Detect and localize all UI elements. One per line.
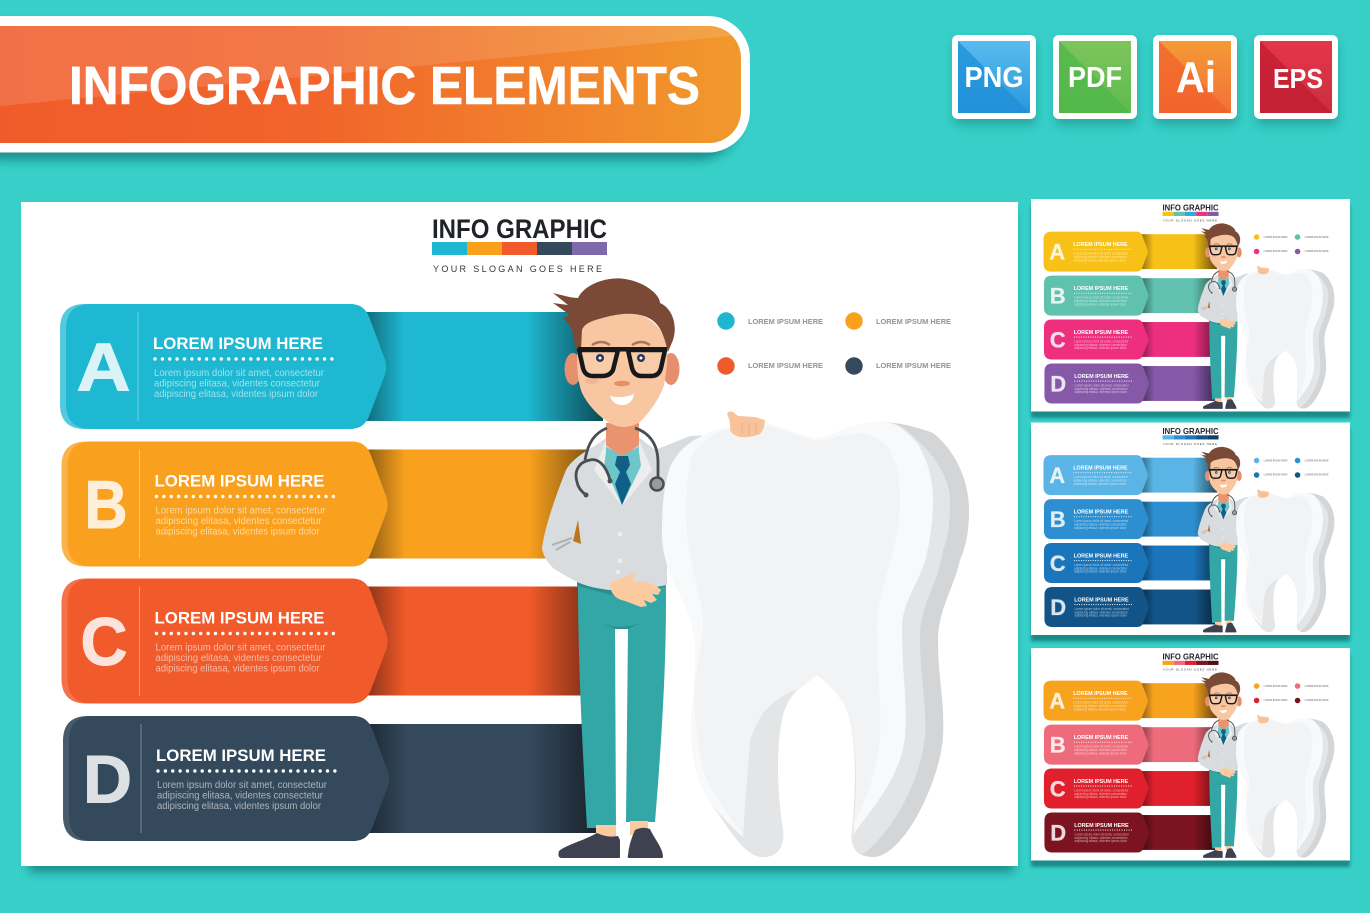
panel: thumbnail warm: LOREM IPSUM HERE (1264, 685, 1288, 688)
title text: INFOGRAPHIC ELEMENTS (69, 56, 700, 116)
panel: thumbnail warm: INFO GRAPHIC (1163, 652, 1219, 662)
band B: adipiscing elitasa, videntes consectetur (156, 516, 322, 527)
panel: thumbnail multicolour: LOREM IPSUM HERE (1264, 250, 1288, 253)
panel: thumbnail blue: YOUR SLOGAN GOES HERE (1163, 442, 1217, 446)
panel: thumbnail multicolour: adipiscing elitasa, videntes consectetur (1074, 343, 1128, 347)
band C: C (80, 604, 128, 680)
band C: adipiscing elitasa, videntes ipsum dolor (156, 664, 320, 674)
panel: thumbnail multicolour: adipiscing elitasa, videntes ipsum dolor (1074, 302, 1127, 306)
legend: LOREM IPSUM HERE (748, 317, 823, 326)
panel: thumbnail multicolour (1031, 199, 1350, 418)
panel: thumbnail multicolour: YOUR SLOGAN GOES HERE (1163, 218, 1217, 222)
band D: adipiscing elitasa, videntes ipsum dolor (157, 801, 322, 812)
panel: thumbnail warm (1031, 648, 1350, 867)
panel: thumbnail multicolour: adipiscing elitasa, videntes ipsum dolor (1075, 390, 1128, 394)
panel: thumbnail blue (1031, 422, 1350, 641)
panel: thumbnail warm: LOREM IPSUM HERE (1305, 699, 1329, 702)
panel: thumbnail warm: adipiscing elitasa, videntes ipsum dolor (1074, 751, 1127, 755)
heading: info graphic: YOUR SLOGAN GOES HERE (433, 264, 602, 274)
band A: LOREM IPSUM HERE (153, 334, 323, 353)
panel: thumbnail warm: LOREM IPSUM HERE (1074, 735, 1128, 741)
panel: thumbnail multicolour: LOREM IPSUM HERE (1074, 286, 1128, 292)
panel: thumbnail blue: adipiscing elitasa, videntes ipsum dolor (1074, 526, 1127, 530)
panel: thumbnail blue: LOREM IPSUM HERE (1073, 466, 1128, 472)
panel: thumbnail warm: adipiscing elitasa, videntes ipsum dolor (1074, 795, 1127, 799)
panel: thumbnail warm: Lorem ipsum dolor sit amet, consectetur (1074, 745, 1129, 749)
icon: PDF format badge (1053, 35, 1137, 125)
panel: thumbnail multicolour: LOREM IPSUM HERE (1264, 236, 1288, 239)
panel: thumbnail multicolour: Lorem ipsum dolor sit amet, consectetur (1074, 252, 1129, 256)
panel: thumbnail blue: adipiscing elitasa, videntes consectetur (1075, 610, 1129, 614)
panel: thumbnail multicolour: Lorem ipsum dolor sit amet, consectetur (1074, 340, 1129, 344)
panel: thumbnail blue: C (1050, 551, 1066, 576)
panel: thumbnail blue: LOREM IPSUM HERE (1074, 597, 1129, 603)
panel: thumbnail warm: LOREM IPSUM HERE (1073, 691, 1128, 697)
panel: thumbnail blue: LOREM IPSUM HERE (1305, 460, 1329, 463)
panel: thumbnail blue: adipiscing elitasa, videntes ipsum dolor (1074, 570, 1127, 574)
panel: thumbnail warm: adipiscing elitasa, videntes ipsum dolor (1074, 707, 1127, 711)
panel: thumbnail warm: Lorem ipsum dolor sit amet, consectetur (1074, 701, 1129, 705)
panel: thumbnail multicolour: adipiscing elitasa, videntes ipsum dolor (1074, 258, 1127, 262)
panel: thumbnail warm: YOUR SLOGAN GOES HERE (1163, 667, 1217, 671)
legend: LOREM IPSUM HERE (876, 361, 951, 370)
band C: LOREM IPSUM HERE (154, 608, 324, 628)
panel: thumbnail multicolour: D (1050, 371, 1066, 396)
panel: thumbnail blue: INFO GRAPHIC (1163, 426, 1219, 436)
band A: A (76, 330, 130, 406)
icon: Ai format badge (1153, 35, 1237, 125)
panel: thumbnail warm: adipiscing elitasa, videntes consectetur (1075, 836, 1129, 840)
panel: thumbnail multicolour: B (1050, 283, 1066, 308)
panel: thumbnail warm: adipiscing elitasa, videntes ipsum dolor (1075, 839, 1128, 843)
heading: info graphic: INFO GRAPHIC (432, 214, 607, 244)
panel: thumbnail multicolour: Lorem ipsum dolor sit amet, consectetur (1075, 384, 1130, 388)
band C (62, 578, 604, 704)
panel: thumbnail blue: Lorem ipsum dolor sit amet, consectetur (1075, 607, 1130, 611)
panel: thumbnail multicolour: INFO GRAPHIC (1163, 203, 1219, 213)
panel: thumbnail multicolour: adipiscing elitasa, videntes consectetur (1075, 387, 1129, 391)
heading: info graphic (432, 214, 607, 274)
panel: thumbnail warm: Lorem ipsum dolor sit amet, consectetur (1074, 789, 1129, 793)
panel: thumbnail warm: C (1050, 776, 1066, 801)
panel: thumbnail multicolour: LOREM IPSUM HERE (1074, 330, 1128, 336)
panel: thumbnail multicolour: LOREM IPSUM HERE (1073, 242, 1128, 248)
band D (63, 716, 606, 841)
panel: thumbnail blue: Lorem ipsum dolor sit amet, consectetur (1074, 519, 1129, 523)
panel: thumbnail multicolour: Lorem ipsum dolor sit amet, consectetur (1074, 296, 1129, 300)
icon: EPS format badge: EPS (1273, 63, 1323, 94)
band A: adipiscing elitasa, videntes ipsum dolor (154, 389, 319, 400)
band C: adipiscing elitasa, videntes consectetur (156, 653, 322, 664)
panel: thumbnail warm: D (1050, 820, 1066, 845)
panel: thumbnail blue: Lorem ipsum dolor sit amet, consectetur (1074, 475, 1129, 479)
panel: thumbnail blue: D (1050, 595, 1066, 620)
band C: Lorem ipsum dolor sit amet, consectetur (156, 642, 326, 654)
panel: thumbnail warm: A (1049, 688, 1065, 713)
panel: thumbnail warm: LOREM IPSUM HERE (1074, 779, 1128, 785)
band B (62, 442, 604, 566)
doctor character (542, 278, 712, 858)
band D: D (83, 742, 132, 818)
icon: PNG format badge (952, 35, 1036, 125)
panel: thumbnail warm: LOREM IPSUM HERE (1074, 823, 1129, 829)
panel: thumbnail multicolour: A (1049, 239, 1065, 264)
panel: thumbnail blue: A (1049, 463, 1065, 488)
panel: thumbnail warm: adipiscing elitasa, videntes consectetur (1074, 792, 1128, 796)
icon: Ai format badge: Ai (1176, 53, 1216, 102)
panel: thumbnail blue: adipiscing elitasa, videntes ipsum dolor (1075, 614, 1128, 618)
band A (60, 304, 603, 429)
panel: thumbnail blue: LOREM IPSUM HERE (1305, 474, 1329, 477)
panel: thumbnail blue: Lorem ipsum dolor sit amet, consectetur (1074, 563, 1129, 567)
band A: Lorem ipsum dolor sit amet, consectetur (154, 368, 325, 379)
title banner (0, 16, 750, 160)
panel: thumbnail multicolour: LOREM IPSUM HERE (1305, 236, 1329, 239)
panel: thumbnail warm: adipiscing elitasa, videntes consectetur (1074, 704, 1128, 708)
panel: thumbnail blue: LOREM IPSUM HERE (1074, 553, 1128, 559)
panel: thumbnail multicolour: LOREM IPSUM HERE (1074, 374, 1129, 380)
legend: LOREM IPSUM HERE (876, 317, 951, 326)
icon: PDF format badge: PDF (1068, 62, 1122, 94)
band B: LOREM IPSUM HERE (154, 472, 324, 490)
panel: thumbnail multicolour: LOREM IPSUM HERE (1305, 250, 1329, 253)
panel: thumbnail warm: adipiscing elitasa, videntes consectetur (1074, 748, 1128, 752)
band D: LOREM IPSUM HERE (156, 746, 326, 765)
panel: main infographic (21, 202, 1018, 872)
panel: thumbnail blue: adipiscing elitasa, videntes ipsum dolor (1074, 482, 1127, 486)
band B: B (84, 467, 128, 543)
band B: adipiscing elitasa, videntes ipsum dolor (156, 526, 320, 538)
panel: thumbnail warm: LOREM IPSUM HERE (1264, 699, 1288, 702)
panel: thumbnail multicolour: C (1050, 327, 1066, 352)
panel: thumbnail multicolour: adipiscing elitasa, videntes consectetur (1074, 299, 1128, 303)
band B: Lorem ipsum dolor sit amet, consectetur (156, 506, 326, 516)
panel: thumbnail blue: LOREM IPSUM HERE (1264, 474, 1288, 477)
tooth (662, 422, 969, 857)
icon: PNG format badge: PNG (964, 62, 1024, 94)
panel: thumbnail multicolour: adipiscing elitasa, videntes consectetur (1074, 255, 1128, 259)
hand on tooth (727, 411, 765, 437)
panel: thumbnail blue: LOREM IPSUM HERE (1264, 460, 1288, 463)
panel: thumbnail blue: adipiscing elitasa, videntes consectetur (1074, 566, 1128, 570)
panel: thumbnail warm: Lorem ipsum dolor sit amet, consectetur (1075, 833, 1130, 837)
panel: thumbnail blue: B (1050, 507, 1066, 532)
icon: EPS format badge (1254, 35, 1338, 125)
band D: Lorem ipsum dolor sit amet, consectetur (157, 780, 328, 791)
panel: thumbnail multicolour: adipiscing elitasa, videntes ipsum dolor (1074, 346, 1127, 350)
panel: thumbnail blue: LOREM IPSUM HERE (1074, 510, 1128, 516)
panel: thumbnail warm: LOREM IPSUM HERE (1305, 685, 1329, 688)
band D: adipiscing elitasa, videntes consectetur (157, 790, 324, 802)
panel: thumbnail blue: adipiscing elitasa, videntes consectetur (1074, 479, 1128, 483)
panel: thumbnail blue: adipiscing elitasa, videntes consectetur (1074, 523, 1128, 527)
band A: adipiscing elitasa, videntes consectetur (154, 378, 321, 390)
legend: LOREM IPSUM HERE (748, 361, 823, 370)
panel: thumbnail warm: B (1050, 732, 1066, 757)
legend (717, 312, 951, 375)
